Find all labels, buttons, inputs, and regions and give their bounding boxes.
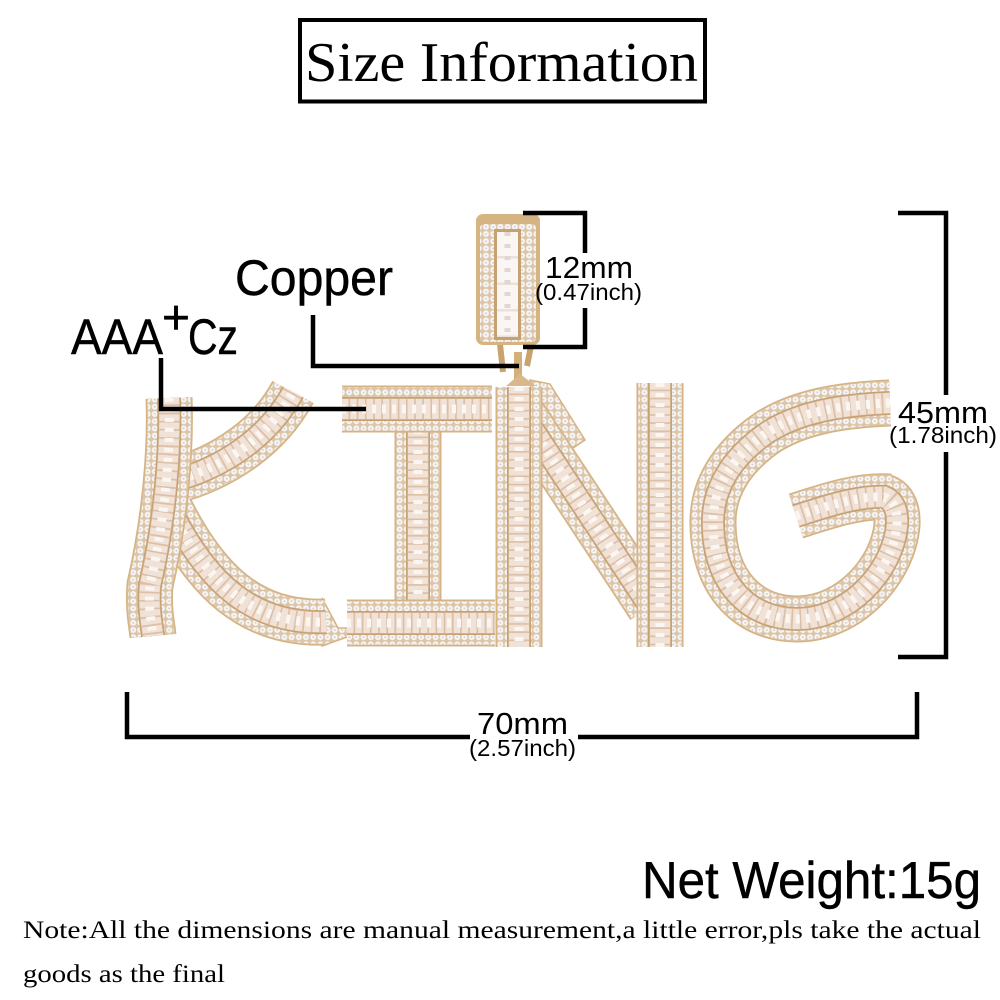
letter G [713,403,897,619]
net weight: Net Weight:15g [642,852,981,910]
label: AAA+Cz: + [162,292,190,345]
label: 12mm: (0.47inch) [535,279,642,305]
annotation lines: 12mm bracket [523,213,585,347]
pendant: KING letters [149,380,897,647]
label: 12mm: 12mm [545,250,633,285]
note: goods as the final [23,961,225,988]
note: Note:All the dimensions are manual measurement,a little error,pls take the actual [23,917,981,944]
label: 45mm: 45mm [898,395,988,430]
label: 45mm: (1.78inch) [889,422,997,448]
title: Size Information [305,32,698,94]
label: 12mm [535,250,642,305]
note [23,917,981,988]
label: 70mm: 70mm [477,706,568,741]
letter N [519,380,660,647]
letter I [342,409,495,623]
label: AAA+Cz [71,292,238,365]
leader line: copper [313,315,519,366]
label: 45mm [889,395,997,448]
label: 70mm [469,706,576,761]
label: Copper: Copper [235,250,393,306]
label: AAA+Cz: Cz [188,309,238,365]
annotation lines: 45mm bracket [898,213,946,657]
leader line: AAA+ Cz [161,358,366,409]
annotation lines: 70mm bracket [127,692,917,737]
label: AAA+Cz: AAA [71,309,164,365]
letter K [149,392,350,646]
label: 70mm: (2.57inch) [469,735,576,761]
pendant bail and connector [476,214,540,386]
